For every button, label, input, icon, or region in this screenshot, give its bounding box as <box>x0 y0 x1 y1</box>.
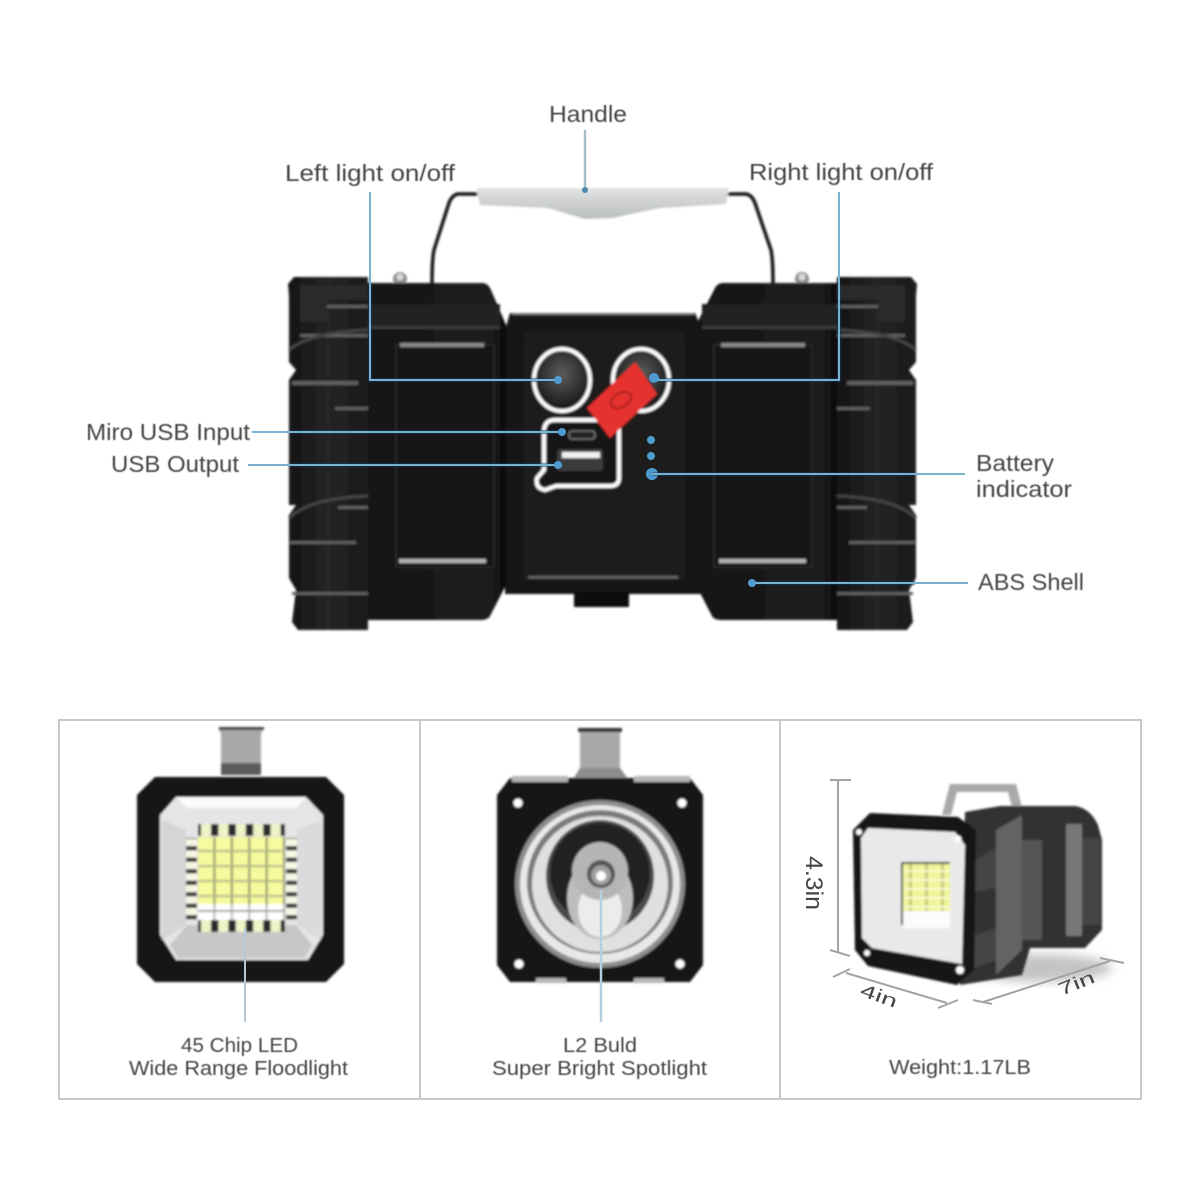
screw right <box>795 272 809 286</box>
panel: dimensions view <box>800 780 1124 1079</box>
spotlight illustration <box>497 728 703 983</box>
handle callout line <box>582 130 588 193</box>
main product illustration <box>288 188 917 630</box>
panel: bottom frame with dividers <box>59 720 1141 1099</box>
micro usb port <box>569 431 595 439</box>
screw left <box>393 272 407 286</box>
abs shell callout line <box>748 579 968 587</box>
handle wire <box>432 194 773 283</box>
spotlight caption: Super Bright Spotlight <box>492 1058 707 1080</box>
label: Battery indicator: indicator <box>976 476 1072 502</box>
right wing <box>837 277 917 630</box>
label: Battery indicator: Battery <box>976 450 1055 476</box>
red rubber tag <box>587 362 657 438</box>
spotlight caption: L2 Buld <box>563 1035 637 1057</box>
label: Miro USB Input: Miro USB Input <box>86 419 251 445</box>
label: Handle: Handle <box>549 101 627 127</box>
height label: 4.3in <box>800 856 827 910</box>
usb port cover outline <box>537 420 619 490</box>
depth dimension line <box>833 969 958 1008</box>
right power button <box>613 349 669 411</box>
battery callout line <box>652 472 965 476</box>
floodlight caption <box>129 1035 348 1080</box>
callout lines <box>248 130 968 587</box>
right block <box>696 283 837 620</box>
left wing <box>288 277 368 630</box>
label: Right light on/off: Right light on/off <box>749 159 934 185</box>
panel: floodlight view <box>129 727 348 1080</box>
dimensioned product illustration <box>853 784 1112 985</box>
center housing <box>505 313 702 607</box>
panel: spotlight view <box>492 728 707 1080</box>
spotlight caption <box>492 1035 707 1080</box>
battery leds <box>646 436 658 480</box>
depth label: 4in <box>858 980 900 1012</box>
left power button <box>534 349 590 411</box>
width dimension line <box>973 958 1124 1004</box>
micro usb callout line <box>252 428 566 436</box>
left block <box>368 283 506 620</box>
width label: 7in <box>1055 967 1098 1000</box>
floodlight caption: Wide Range Floodlight <box>129 1058 348 1080</box>
label: ABS Shell: ABS Shell <box>978 569 1084 595</box>
left light callout line <box>370 192 562 384</box>
spotlight callout line <box>600 890 602 1022</box>
floodlight caption: 45 Chip LED <box>181 1035 298 1057</box>
floodlight callout line <box>244 928 246 1022</box>
floodlight illustration <box>137 727 344 982</box>
label: Battery indicator <box>976 450 1072 502</box>
label: USB Output: USB Output <box>111 451 240 477</box>
handle grip <box>476 188 729 219</box>
label: Left light on/off: Left light on/off <box>285 160 456 186</box>
usb-a port <box>557 449 603 471</box>
usb output callout line <box>248 461 562 469</box>
height dimension line <box>830 780 851 956</box>
all labels <box>86 101 1084 595</box>
right light callout line <box>649 192 839 383</box>
weight caption: Weight:1.17LB <box>889 1057 1031 1079</box>
